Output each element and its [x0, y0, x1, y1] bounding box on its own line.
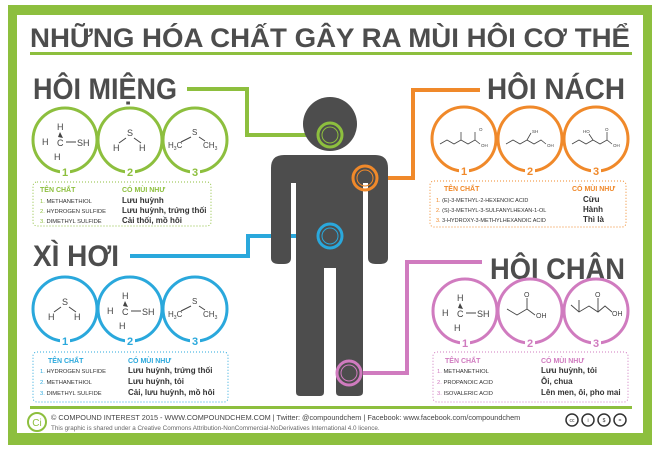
panel: xi hoi: 1. HYDROGEN SULFIDE [40, 369, 106, 375]
panel: xi hoi: TÊN CHẤT [48, 355, 84, 365]
panel: hoi mieng: Lưu huỳnh, trứng thối [122, 206, 206, 215]
table [33, 182, 211, 226]
heading: HÔI MIỆNG [33, 72, 177, 106]
panel: hoi chan: 3 [593, 338, 599, 350]
panel: hoi chan: 2 [527, 338, 533, 350]
panel: xi hoi: Lưu huỳnh, trứng thối [128, 366, 212, 375]
panel: hoi chan: Lưu huỳnh, tỏi [541, 366, 597, 375]
panel: hoi nach: O [479, 127, 483, 132]
panel: hoi nach: 1 [461, 166, 467, 178]
marker: gut [318, 224, 342, 248]
panel: xi hoi: 2. METHANETHIOL [40, 380, 93, 386]
marker: armpit [353, 166, 377, 190]
panel: hoi chan: 1 [462, 338, 468, 350]
panel: hoi chan: Ôi, chua [541, 377, 573, 386]
connector lines [130, 89, 482, 373]
panel: hoi mieng: 2 [127, 167, 133, 179]
icon: cc badges [566, 414, 626, 426]
table [33, 352, 228, 402]
footer: = [619, 418, 622, 424]
panel: hoi mieng: 1. METHANETHIOL [40, 199, 93, 205]
panel: hoi mieng: CÓ MÙI NHƯ [122, 185, 165, 194]
panel: hoi nach: Cừu [583, 195, 600, 204]
panel: hoi mieng: 1 [62, 167, 68, 179]
panel: hoi nach: HO [583, 129, 590, 134]
panel: hoi nach: OH [613, 143, 620, 148]
panel: hoi nach: 2. (S)-3-METHYL-3-SULFANYLHEXAN-1-OL [436, 208, 546, 214]
panel: xi hoi: 2 [127, 336, 133, 348]
panel: hoi chan: 1. METHANETHIOL [437, 369, 490, 375]
footer: This graphic is shared under a Creative Commons Attribution-NonCommercial-NoDerivatives International 4.0 licence. [51, 425, 380, 432]
panel: hoi nach: CÓ MÙI NHƯ [572, 184, 615, 193]
icon: CI logo: Ci [32, 418, 42, 429]
marker: mouth [318, 123, 342, 147]
panel: hoi nach: OH [481, 143, 488, 148]
panel: xi hoi [33, 239, 228, 402]
molecule circles [33, 108, 227, 172]
panel: xi hoi: CÓ MÙI NHƯ [128, 356, 171, 365]
panel: hoi nach: O [605, 127, 609, 132]
heading: HÔI NÁCH [487, 72, 625, 106]
panel: xi hoi: 3. DIMETHYL SULFIDE [40, 391, 102, 397]
table [430, 181, 626, 227]
panel: hoi chan: 2. PROPANOIC ACID [437, 380, 493, 386]
panel: hoi chan: OH [536, 313, 546, 320]
panel: xi hoi: Lưu huỳnh, tỏi [128, 377, 184, 386]
footer: $ [603, 418, 606, 424]
panel: hoi chan: O [524, 292, 530, 299]
panel: hoi chan: O [595, 292, 601, 299]
panel: xi hoi: Cải, lưu huỳnh, mồ hôi [128, 388, 215, 397]
panel: hoi chan: OH [612, 311, 622, 318]
marker: foot [337, 361, 361, 385]
panel: hoi mieng: 3. DIMETHYL SULFIDE [40, 219, 102, 225]
panel: hoi mieng: 3 [192, 167, 198, 179]
panel: hoi nach: 1. (E)-3-METHYL-2-HEXENOIC ACID [436, 198, 528, 204]
panel: hoi nach: OH [547, 143, 554, 148]
panel: hoi chan: 3. ISOVALERIC ACID [437, 391, 493, 397]
heading: XÌ HƠI [33, 239, 119, 273]
icon: CI logo [28, 413, 46, 431]
panel: hoi mieng: Lưu huỳnh [122, 196, 164, 205]
panel: hoi nach: SH [532, 129, 538, 134]
panel: hoi nach [430, 72, 628, 227]
panel: hoi nach: Hành [583, 205, 603, 214]
footer: © COMPOUND INTEREST 2015 - WWW.COMPOUNDCHEM.COM | Twitter: @compoundchem | Facebook: www.facebook.com/compoundchem [51, 413, 520, 422]
panel: hoi chan: TÊN CHẤT [445, 355, 481, 365]
table [433, 352, 628, 402]
panel: hoi mieng: 2. HYDROGEN SULFIDE [40, 209, 106, 215]
panel: hoi nach: Thì là [583, 215, 604, 224]
footer: i [587, 418, 589, 424]
panel: hoi chan [433, 252, 628, 402]
panel: xi hoi: 1 [62, 336, 68, 348]
panel: hoi chan: CÓ MÙI NHƯ [541, 356, 584, 365]
heading: HÔI CHÂN [490, 252, 625, 286]
panel: hoi nach: TÊN CHẤT [444, 183, 480, 193]
footer [28, 413, 626, 432]
panel: hoi nach: 2 [527, 166, 533, 178]
panel: hoi mieng: TÊN CHẤT [40, 184, 76, 194]
panel: hoi nach: 3 [593, 166, 599, 178]
panel: hoi nach: 3. 3-HYDROXY-3-METHYLHEXANOIC ACID [436, 218, 546, 224]
panel: hoi mieng: Cải thối, mồ hôi [122, 216, 182, 225]
panel: hoi chan: Lên men, ôi, pho mai [541, 388, 621, 397]
body figure [271, 97, 388, 396]
panel: xi hoi: 3 [192, 336, 198, 348]
panel: hoi mieng [33, 72, 227, 226]
footer: cc [570, 418, 575, 424]
title: NHỮNG HÓA CHẤT GÂY RA MÙI HÔI CƠ THỂ [30, 22, 630, 53]
